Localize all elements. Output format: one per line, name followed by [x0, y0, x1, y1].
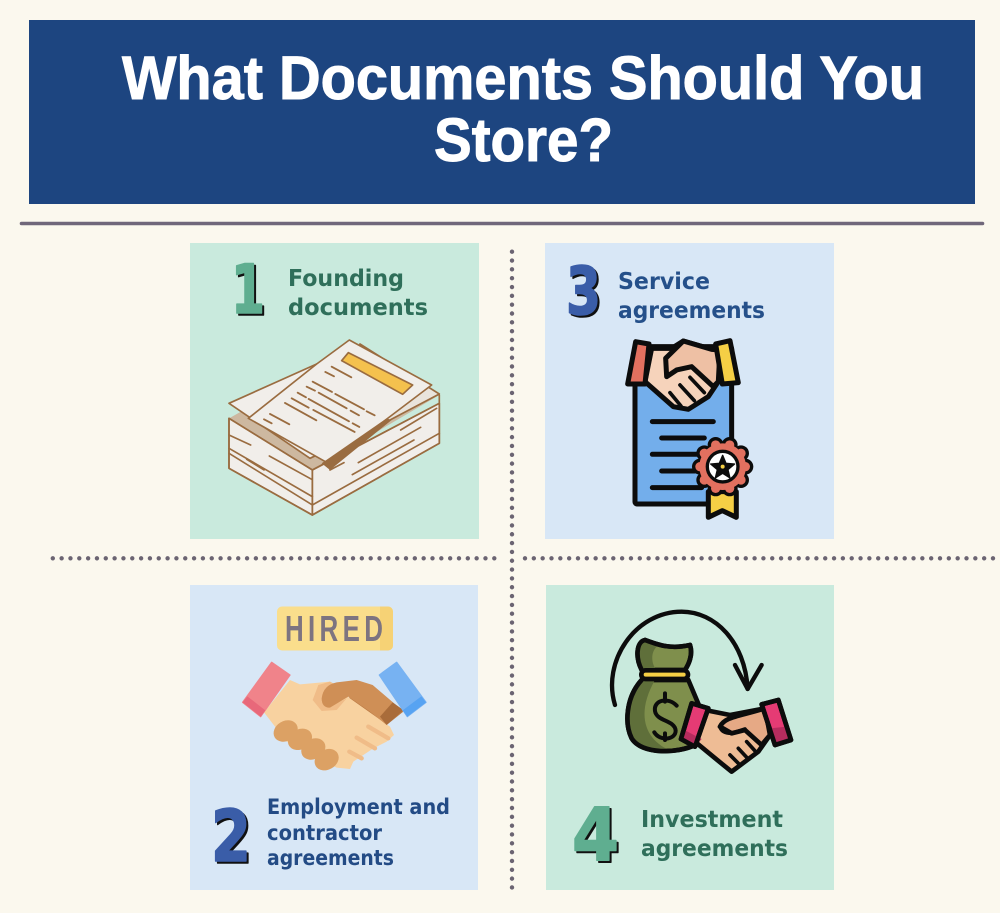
- number 1: 1: [231, 251, 265, 330]
- title text: What Documents Should You: [122, 44, 924, 112]
- heading: service agreements: Service: [618, 269, 710, 295]
- heading: investment agreements: Investment: [641, 807, 783, 833]
- heading: founding documents: documents: [288, 295, 428, 321]
- icon: signed agreement with handshake and seal: [628, 341, 753, 517]
- arrow: [612, 612, 762, 705]
- icon: stack of papers: [229, 340, 439, 515]
- number 4: 4: [572, 793, 619, 878]
- number 2: 2: [213, 797, 253, 880]
- heading: employment and contractor agreements: Employment and: [267, 795, 450, 819]
- icon: money bag, handshake and arrow: [612, 612, 791, 772]
- number 1: 1: [233, 253, 267, 332]
- heading: investment agreements: agreements: [641, 836, 788, 862]
- title text: Store?: [434, 106, 613, 174]
- panel 2: employment and contractor agreements: [190, 585, 478, 890]
- number 4: 4: [574, 795, 621, 880]
- number 3: 3: [566, 253, 601, 330]
- panel 1: founding documents: [190, 243, 479, 539]
- heading: employment and contractor agreements: agreements: [267, 846, 394, 870]
- panel 4: investment agreements: [546, 585, 834, 890]
- number 2: 2: [211, 795, 251, 878]
- panel 3: service agreements: [545, 243, 834, 539]
- heading: employment and contractor agreements: contractor: [267, 821, 383, 845]
- heading: founding documents: Founding: [288, 266, 404, 292]
- icon: hired sign: HIRED: [285, 609, 387, 649]
- heading: service agreements: agreements: [618, 298, 765, 324]
- icon: handshake: [243, 662, 426, 775]
- title banner: [29, 20, 975, 204]
- number 3: 3: [568, 255, 603, 332]
